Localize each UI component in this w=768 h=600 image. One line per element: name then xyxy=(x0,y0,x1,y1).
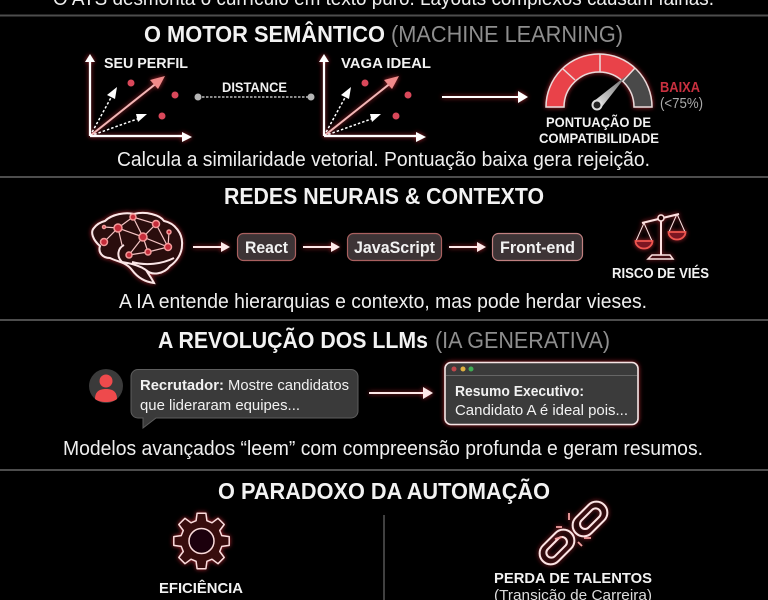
arrow: brain to React xyxy=(193,242,230,252)
window: executive summary: Resumo Executivo: xyxy=(455,383,584,400)
label: compatibility score: PONTUAÇÃO DE xyxy=(546,113,651,130)
heading: semantic engine xyxy=(144,20,623,47)
label: talent loss xyxy=(494,570,652,600)
icon: bias scales xyxy=(636,214,686,259)
connector: distance: DISTANCE xyxy=(222,79,287,95)
chat bubble: recruiter: que lideraram equipes... xyxy=(140,397,300,414)
label: low score: BAIXA xyxy=(660,79,700,96)
arrow: to score xyxy=(442,91,528,103)
panel: automation paradox xyxy=(159,477,652,600)
heading: LLM revolution: A REVOLUÇÃO DOS LLMs xyxy=(158,326,428,353)
label: low score xyxy=(660,79,703,112)
icon: recruiter avatar xyxy=(89,369,123,403)
caption: semantic engine: Calcula a similaridade vetorial. Pontuação baixa gera rejeição. xyxy=(117,149,650,171)
heading: LLM revolution: (IA GENERATIVA) xyxy=(435,327,610,353)
gauge: compatibility score xyxy=(539,54,703,146)
connector: distance xyxy=(194,79,314,100)
label: bias risk: RISCO DE VIÉS xyxy=(612,265,709,282)
label: talent loss: PERDA DE TALENTOS xyxy=(494,570,652,587)
chart: vaga ideal vector space xyxy=(319,54,431,142)
icon: gear xyxy=(174,513,229,569)
pill: Front-end: Front-end xyxy=(500,239,575,257)
arrow: React to JavaScript xyxy=(303,242,340,252)
heading: neural networks: REDES NEURAIS & CONTEXTO xyxy=(224,183,544,209)
heading: automation paradox: O PARADOXO DA AUTOMAÇÃO xyxy=(218,477,550,504)
arrow: prompt to summary xyxy=(369,387,433,399)
chat bubble: recruiter xyxy=(131,370,358,428)
label: compatibility score: COMPATIBILIDADE xyxy=(539,130,659,146)
chart: vaga ideal vector space: VAGA IDEAL xyxy=(341,55,431,72)
label: efficiency: EFICIÊNCIA xyxy=(159,579,243,597)
arrow: JavaScript to Front-end xyxy=(449,242,486,252)
panel: neural networks xyxy=(92,183,709,313)
window: executive summary xyxy=(445,362,638,424)
panel: LLM revolution xyxy=(63,326,703,460)
heading: LLM revolution xyxy=(158,326,610,353)
chart: seu perfil vector space: SEU PERFIL xyxy=(104,55,188,72)
pill: Front-end xyxy=(492,234,582,260)
icon: broken chain xyxy=(535,497,612,569)
label: compatibility score xyxy=(539,113,659,146)
heading: semantic engine: (MACHINE LEARNING) xyxy=(391,21,623,47)
caption: neural networks: A IA entende hierarquias e contexto, mas pode herdar vieses. xyxy=(119,291,647,313)
label: low score: (<75%) xyxy=(660,95,703,112)
window: executive summary: Candidato A é ideal pois... xyxy=(455,402,628,419)
pill: React: React xyxy=(245,239,288,257)
pill: React xyxy=(238,234,296,260)
pill: JavaScript: JavaScript xyxy=(354,239,435,257)
icon: brain network xyxy=(92,213,182,283)
caption: LLM revolution: Modelos avançados “leem” com compreensão profunda e geram resumos. xyxy=(63,438,703,460)
pill: JavaScript xyxy=(348,234,442,260)
chat bubble: recruiter: Recrutador: Mostre candidatos xyxy=(140,377,349,394)
chart: seu perfil vector space xyxy=(85,54,192,142)
heading: semantic engine: O MOTOR SEMÂNTICO xyxy=(144,20,385,47)
panel: semantic engine xyxy=(85,20,703,171)
